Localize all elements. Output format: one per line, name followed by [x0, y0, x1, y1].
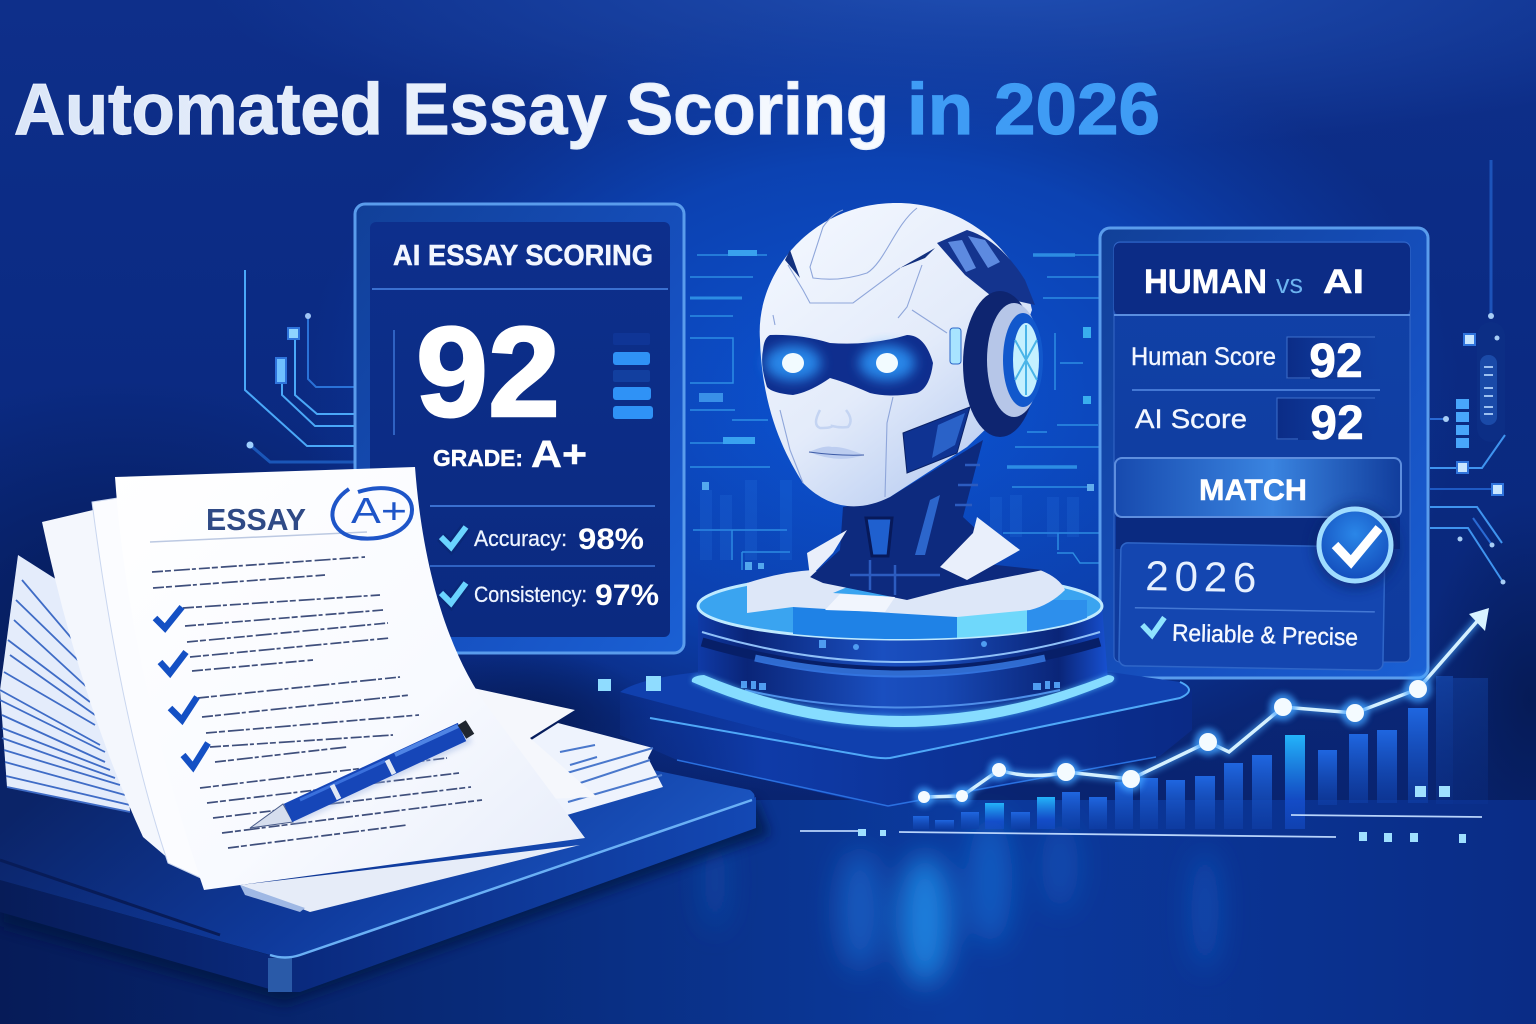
desk: [0, 770, 770, 1005]
visor: [762, 335, 933, 396]
particles: [598, 676, 661, 691]
AI score: [1135, 397, 1380, 450]
chart: [800, 608, 1489, 843]
AI score: 92: [1310, 397, 1364, 450]
match banner: [1115, 458, 1401, 517]
lips: [809, 447, 864, 459]
heading: AI: [1323, 263, 1364, 301]
match banner: MATCH: [1199, 474, 1307, 507]
essay heading: ESSAY: [206, 502, 306, 537]
accuracy row: Accuracy:: [474, 526, 567, 551]
consistency row: Consistency:: [474, 582, 587, 607]
consistency row: [441, 579, 659, 612]
human score: [1131, 335, 1380, 388]
paper fan stack: [0, 555, 130, 812]
level bars: [613, 333, 653, 419]
headphone: [963, 291, 1037, 437]
human score: 92: [1309, 335, 1363, 388]
cheek module: [903, 407, 970, 473]
year box: 2026: [1145, 552, 1257, 601]
faint background bars: [700, 480, 1079, 560]
bust base: [747, 570, 1065, 617]
light ring: [692, 675, 1114, 727]
grade: A+: [531, 434, 587, 476]
consistency row: 97%: [595, 579, 659, 612]
heading: HUMAN: [1144, 263, 1267, 301]
robot: [747, 203, 1065, 617]
title: Automated Essay Scoring: [14, 70, 889, 150]
heading: [1144, 263, 1364, 301]
top band: [937, 230, 1035, 305]
floor reflections: [703, 815, 1219, 985]
human score: Human Score: [1131, 343, 1276, 371]
dark cracks: [785, 248, 935, 278]
nose: [816, 410, 851, 428]
head shell: [760, 203, 1032, 506]
dark band below match: [1116, 517, 1400, 549]
essay paper: [115, 467, 585, 890]
AI score: AI Score: [1135, 404, 1247, 434]
shoulder plates: [940, 517, 1020, 580]
check badge: [1314, 505, 1398, 589]
essay text lines: [152, 557, 482, 848]
accuracy row: 98%: [578, 523, 644, 556]
neck: [810, 440, 1043, 600]
year box: [1119, 543, 1385, 670]
pen: [250, 726, 470, 828]
score 92: 92: [416, 301, 560, 444]
right paper stack: [450, 683, 663, 815]
accuracy row: [441, 523, 644, 556]
plinth: [620, 672, 1192, 808]
trend line: [924, 618, 1480, 797]
grade: [433, 434, 587, 476]
back sheets: [42, 498, 580, 912]
reliable: Reliable & Precise: [1172, 620, 1358, 652]
A+ stamp: [332, 488, 412, 539]
center data lines left: [690, 250, 1100, 570]
heading: vs: [1276, 269, 1303, 299]
seams: [773, 208, 947, 497]
panel heading: AI ESSAY SCORING: [393, 240, 653, 272]
circuit left: [245, 270, 356, 462]
grade: GRADE:: [433, 445, 523, 471]
title: in 2026: [907, 70, 1160, 150]
panel: AI essay scoring: [355, 204, 684, 653]
platform cylinder: [692, 573, 1114, 727]
circuit right: [1430, 160, 1506, 584]
panel: human vs AI: [1100, 228, 1428, 678]
bars: [913, 676, 1488, 829]
checkmarks: [155, 607, 208, 767]
A+ stamp: A+: [351, 490, 407, 531]
data points: [914, 675, 1432, 807]
